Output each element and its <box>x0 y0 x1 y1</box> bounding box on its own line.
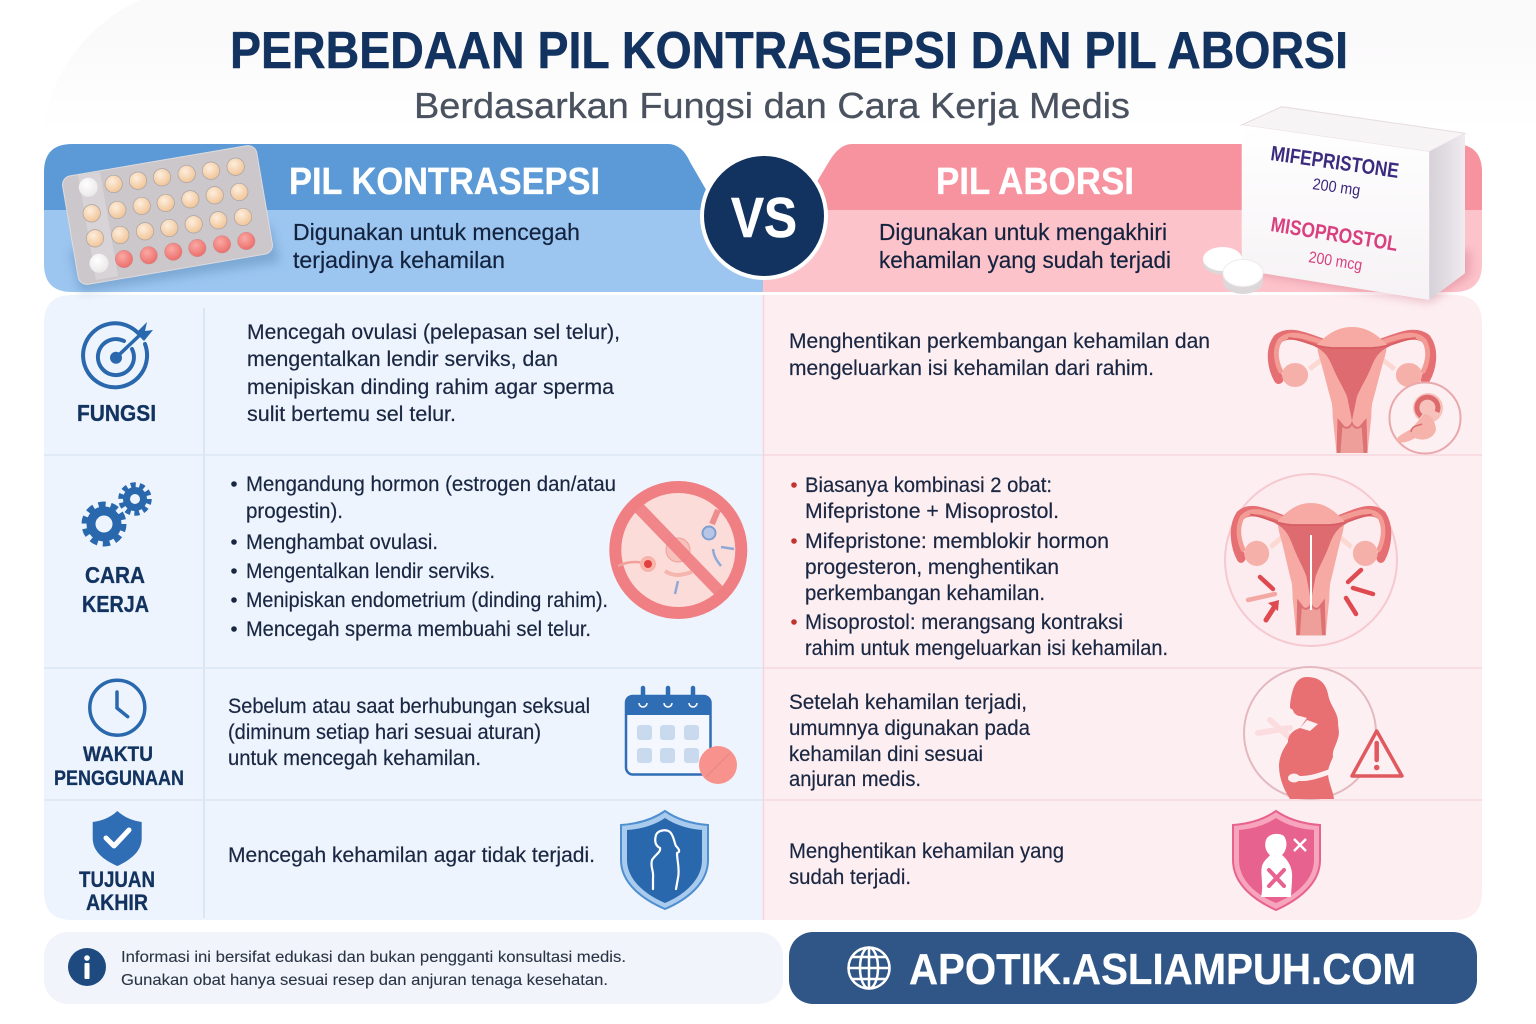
list: cara kerja kontrasepsi: Mengentalkan lendir serviks. <box>246 560 495 583</box>
heading: pil aborsi: PIL ABORSI <box>936 161 1134 203</box>
icon: calendar with pill <box>625 688 737 784</box>
row: fungsi <box>77 321 1460 454</box>
icon: pink shield <box>1233 811 1320 910</box>
label: tujuan akhir: TUJUAN <box>79 867 155 892</box>
list: cara kerja aborsi: Mifepristone: memblokir hormon <box>805 530 1109 553</box>
text: waktu aborsi: Setelah kehamilan terjadi, <box>789 691 1027 714</box>
icon: blister pack <box>61 144 280 292</box>
text: tujuan aborsi: Menghentikan kehamilan yang <box>789 840 1064 863</box>
list: cara kerja kontrasepsi: Menghambat ovulasi. <box>246 531 438 554</box>
heading: pil kontrasepsi: PIL KONTRASEPSI <box>289 161 600 203</box>
icon: clock <box>90 680 145 735</box>
row: cara kerja <box>82 473 1397 660</box>
disclaimer text: Informasi ini bersifat edukasi dan bukan pengganti konsultasi medis. <box>121 949 626 966</box>
text: fungsi aborsi: mengeluarkan isi kehamilan dari rahim. <box>789 357 1154 380</box>
list: cara kerja kontrasepsi: Menipiskan endometrium (dinding rahim). <box>246 589 608 612</box>
list: cara kerja aborsi: perkembangan kehamilan. <box>805 582 1045 605</box>
icon: prohibited ovulation <box>615 487 741 613</box>
text: tujuan aborsi: sudah terjadi. <box>789 866 911 889</box>
text: fungsi kontrasepsi <box>247 321 620 426</box>
subtitle: Berdasarkan Fungsi dan Cara Kerja Medis <box>414 85 1130 126</box>
list: cara kerja aborsi: progesteron, menghentikan <box>805 556 1059 579</box>
icon: embryo in circle <box>1390 382 1460 454</box>
disclaimer text <box>121 949 626 989</box>
title: PERBEDAAN PIL KONTRASEPSI DAN PIL ABORSI <box>230 22 1348 80</box>
list: cara kerja aborsi: rahim untuk mengeluarkan isi kehamilan. <box>805 637 1168 660</box>
icon: medicine box: 200 mcg <box>1307 249 1363 274</box>
icon: globe <box>848 948 890 988</box>
list: cara kerja aborsi <box>791 474 1168 660</box>
icon: warning triangle <box>1352 731 1402 776</box>
icon: uterus contraction <box>1225 474 1397 646</box>
icon: uterus <box>1273 327 1431 453</box>
row: tujuan akhir <box>79 811 1320 915</box>
list: cara kerja aborsi: Biasanya kombinasi 2 obat: <box>805 474 1052 497</box>
text: waktu kontrasepsi: untuk mencegah kehamilan. <box>228 747 481 770</box>
text: fungsi kontrasepsi: menipiskan dinding rahim agar sperma <box>247 376 614 399</box>
icon: blue shield <box>621 811 708 909</box>
description: pil aborsi <box>879 219 1171 273</box>
icon: pregnant woman <box>1244 667 1376 799</box>
label: cara kerja <box>82 562 149 617</box>
label: cara kerja: KERJA <box>82 591 149 617</box>
label: waktu penggunaan: WAKTU <box>83 743 153 766</box>
footer: disclaimer <box>44 932 783 1004</box>
icon: target <box>83 322 153 387</box>
text: waktu kontrasepsi: (diminum setiap hari sesuai aturan) <box>228 721 541 744</box>
badge: VS <box>702 154 826 278</box>
website text: APOTIK.ASLIAMPUH.COM <box>909 945 1416 994</box>
panel background: aborsi <box>763 295 1482 920</box>
icon: medicine box <box>1242 107 1470 302</box>
text: fungsi kontrasepsi: mengentalkan lendir serviks, dan <box>247 348 558 371</box>
label: waktu penggunaan <box>54 743 184 790</box>
description: pil aborsi: Digunakan untuk mengakhiri <box>879 219 1167 245</box>
list: cara kerja aborsi: Misoprostol: merangsang kontraksi <box>805 611 1123 634</box>
icon: medicine box: MIFEPRISTONE <box>1269 142 1400 183</box>
text: waktu aborsi: umumnya digunakan pada <box>789 717 1030 740</box>
text: fungsi aborsi <box>789 330 1210 380</box>
icon: shield check <box>93 811 142 866</box>
icon: medicine box: 200 mg <box>1311 176 1361 200</box>
badge: VS: VS <box>731 186 797 250</box>
text: waktu aborsi: anjuran medis. <box>789 768 921 791</box>
text: waktu aborsi <box>789 691 1030 791</box>
background curve <box>44 0 1536 132</box>
row: waktu penggunaan <box>54 667 1402 799</box>
label: tujuan akhir <box>79 867 155 915</box>
list: cara kerja kontrasepsi: Mengandung hormon (estrogen dan/atau <box>246 473 616 496</box>
list: cara kerja kontrasepsi <box>231 473 616 641</box>
icon: info <box>68 948 106 986</box>
header: pil aborsi <box>763 107 1482 302</box>
text: tujuan aborsi <box>789 840 1064 889</box>
label: fungsi: FUNGSI <box>77 400 156 426</box>
text: fungsi kontrasepsi: sulit bertemu sel telur. <box>247 403 456 426</box>
text: waktu kontrasepsi <box>228 695 590 770</box>
icon: tablets <box>1203 247 1263 294</box>
icon: medicine box: MISOPROSTOL <box>1269 213 1399 256</box>
footer: website banner <box>789 932 1477 1004</box>
text: fungsi aborsi: Menghentikan perkembangan kehamilan dan <box>789 330 1210 353</box>
label: tujuan akhir: AKHIR <box>86 890 148 915</box>
label: cara kerja: CARA <box>85 562 145 588</box>
list: cara kerja kontrasepsi: Mencegah sperma membuahi sel telur. <box>246 618 591 641</box>
text: tujuan kontrasepsi: Mencegah kehamilan agar tidak terjadi. <box>228 844 595 867</box>
description: pil kontrasepsi: terjadinya kehamilan <box>293 247 505 273</box>
description: pil aborsi: kehamilan yang sudah terjadi <box>879 247 1171 273</box>
description: pil kontrasepsi <box>293 219 580 273</box>
label: waktu penggunaan: PENGGUNAAN <box>54 767 184 790</box>
header: pil kontrasepsi <box>44 144 763 292</box>
list: cara kerja kontrasepsi: progestin). <box>246 500 343 523</box>
panel background: kontrasepsi <box>44 295 763 920</box>
disclaimer text: Gunakan obat hanya sesuai resep dan anjuran tenaga kesehatan. <box>121 972 608 989</box>
text: fungsi kontrasepsi: Mencegah ovulasi (pelepasan sel telur), <box>247 321 620 344</box>
description: pil kontrasepsi: Digunakan untuk mencegah <box>293 219 580 245</box>
text: waktu aborsi: kehamilan dini sesuai <box>789 743 983 766</box>
icon: gears <box>85 485 149 543</box>
text: waktu kontrasepsi: Sebelum atau saat berhubungan seksual <box>228 695 590 718</box>
list: cara kerja aborsi: Mifepristone + Misoprostol. <box>805 500 1059 523</box>
